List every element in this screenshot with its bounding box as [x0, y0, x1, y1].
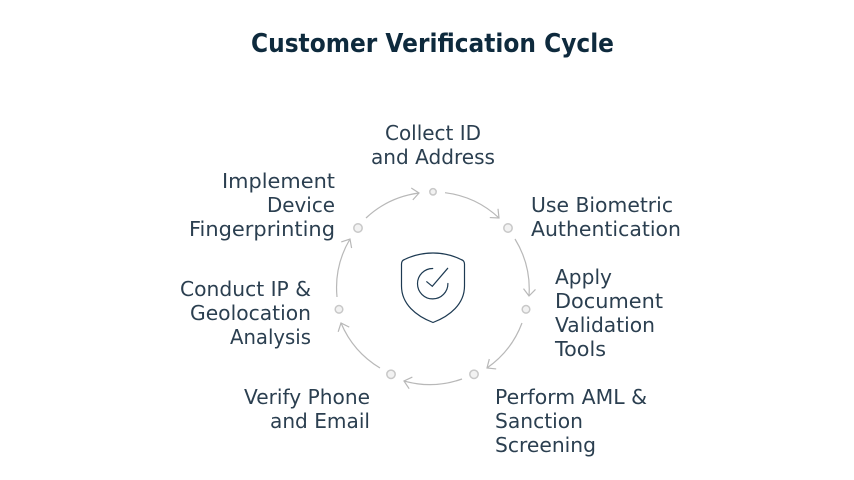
arrow: document to screening — [487, 323, 522, 368]
label: conduct IP and geolocation analysis: Geolocation — [190, 301, 311, 325]
label: conduct IP and geolocation analysis — [180, 277, 311, 349]
label: implement device fingerprinting: Fingerprinting — [189, 217, 335, 241]
label: apply document validation tools: Apply — [555, 265, 612, 289]
label: use biometric authentication: Authentication — [531, 217, 681, 241]
label: implement device fingerprinting: Device — [267, 193, 335, 217]
label: collect ID and address — [371, 121, 495, 169]
arrow: geolocation to device — [337, 239, 350, 297]
label: apply document validation tools: Tools — [554, 337, 606, 361]
node: geolocation — [335, 306, 343, 313]
label: collect ID and address: Collect ID — [385, 121, 481, 145]
label: implement device fingerprinting: Implement — [222, 169, 335, 193]
label: verify phone and email — [244, 385, 370, 433]
label: apply document validation tools — [554, 265, 663, 361]
node: collect — [430, 189, 436, 195]
node: biometric — [504, 224, 512, 232]
arrow: biometric to document — [515, 239, 529, 296]
node: phone — [387, 370, 395, 378]
arrow: device to collect — [366, 193, 419, 218]
arrow: collect to biometric — [445, 193, 499, 218]
label: conduct IP and geolocation analysis: Conduct IP & — [180, 277, 311, 301]
label: perform AML and sanction screening — [495, 385, 647, 457]
cycle diagram — [335, 189, 530, 385]
label: verify phone and email: Verify Phone — [244, 385, 370, 409]
arrow: screening to phone — [404, 379, 462, 385]
node: device — [354, 224, 362, 232]
icon: shield with check — [402, 253, 464, 322]
label: implement device fingerprinting — [189, 169, 335, 241]
label: perform AML and sanction screening: Sanction — [495, 409, 583, 433]
label: apply document validation tools: Document — [555, 289, 663, 313]
label: use biometric authentication — [531, 193, 681, 241]
arrow: phone to geolocation — [341, 323, 380, 368]
node: screening — [470, 370, 478, 378]
label: conduct IP and geolocation analysis: Analysis — [230, 325, 311, 349]
label: use biometric authentication: Use Biometric — [531, 193, 673, 217]
label: verify phone and email: and Email — [270, 409, 370, 433]
label: perform AML and sanction screening: Screening — [495, 433, 596, 457]
label: collect ID and address: and Address — [371, 145, 495, 169]
title: Customer Verification Cycle — [251, 29, 614, 59]
node: document — [522, 306, 530, 313]
label: apply document validation tools: Validation — [555, 313, 655, 337]
label: perform AML and sanction screening: Perform AML & — [495, 385, 647, 409]
